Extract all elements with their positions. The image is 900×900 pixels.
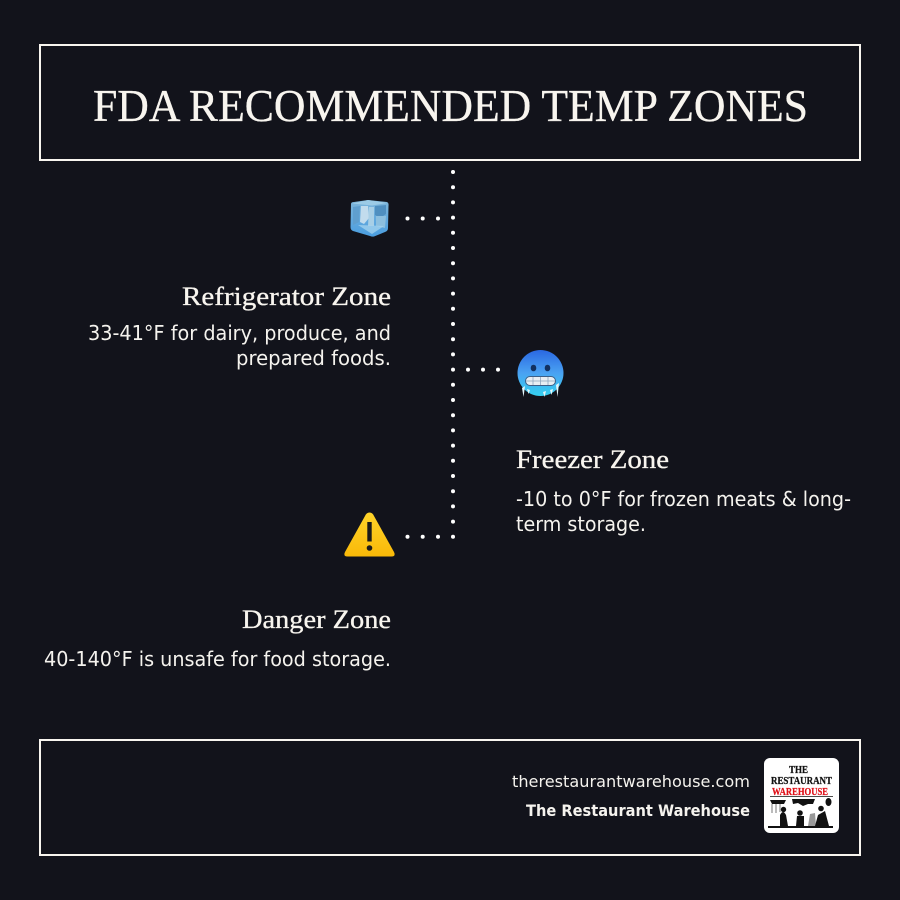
logo — [764, 758, 839, 833]
title: FDA RECOMMENDED TEMP ZONES — [93, 80, 808, 131]
connector: danger — [406, 535, 440, 539]
description: -10 to 0°F for frozen meats & long- — [516, 487, 851, 511]
description — [516, 487, 851, 536]
website: therestaurantwarehouse.com — [512, 772, 750, 791]
description — [88, 321, 391, 370]
icon: ice cube — [350, 200, 389, 237]
block: danger zone — [44, 605, 391, 671]
icon: warning triangle — [344, 512, 395, 556]
logo: RESTAURANT — [771, 776, 832, 787]
dotted timeline — [451, 170, 455, 539]
heading: Freezer Zone — [516, 445, 669, 474]
logo: WAREHOUSE — [772, 787, 828, 798]
brand name: The Restaurant Warehouse — [526, 801, 750, 820]
description: 40-140°F is unsafe for food storage. — [44, 647, 391, 671]
footer box — [40, 740, 860, 855]
connector: freezer — [466, 368, 500, 372]
block: refrigerator zone — [88, 282, 391, 370]
description: term storage. — [516, 512, 646, 536]
description: 33-41°F for dairy, produce, and — [88, 321, 391, 345]
title box — [40, 45, 860, 160]
heading: Danger Zone — [242, 605, 391, 634]
connector: refrigerator — [406, 216, 440, 220]
logo: THE — [789, 765, 808, 776]
description: prepared foods. — [236, 346, 391, 370]
block: freezer zone — [516, 445, 851, 536]
heading: Refrigerator Zone — [182, 282, 391, 311]
icon: freezing face — [518, 350, 564, 397]
